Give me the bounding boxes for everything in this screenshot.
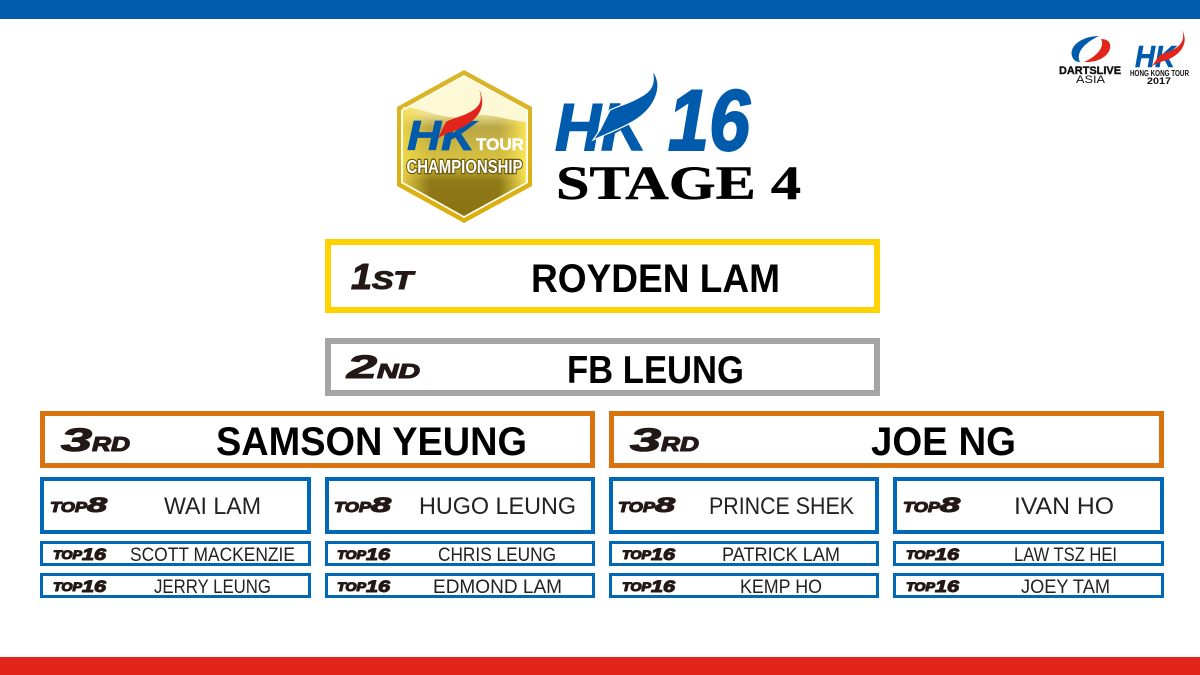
badge: HK Tour Championship hexagon [397,70,532,223]
label: top 8 [334,494,392,517]
name: Scott Mackenzie: SCOTT MACKENZIE [130,544,295,566]
label: top 16: TOP [337,548,367,562]
name: Jerry Leung: JERRY LEUNG [154,576,271,598]
label: top 16: 16 [82,545,107,564]
name: Joe Ng: JOE NG [871,420,1016,464]
panel: top 16 Joey Tam [894,574,1162,598]
label: top 16: 16 [366,545,391,564]
label: top 8: 8 [940,494,961,517]
label: top 16: TOP [622,580,652,594]
label: 2nd: 2 [345,349,377,385]
panel: 3rd place Samson Yeung [42,414,592,466]
badge: HK Tour Championship hexagon: TOUR [476,135,524,154]
label: top 8: TOP [903,499,941,516]
label: top 16: TOP [906,548,936,562]
panel: top 8 Prince Shek [611,479,877,532]
panel: top 16 Jerry Leung [42,574,310,598]
label: top 8: TOP [334,499,372,516]
logo: HK 16: 16 [668,73,751,169]
label: top 8 [618,494,676,517]
label: 1st: 1 [351,256,372,297]
top blue bar [0,0,1200,19]
logo: Hong Kong Tour 2017 [1130,30,1189,86]
panel: top 16 Law Tsz Hei [894,542,1162,566]
name: Edmond Lam: EDMOND LAM [433,576,562,598]
name: Samson Yeung: SAMSON YEUNG [216,420,527,464]
name: Royden Lam: ROYDEN LAM [531,257,780,301]
label: top 16: TOP [906,580,936,594]
label: top 16 [906,545,960,564]
badge: HK Tour Championship hexagon: HK [407,112,478,159]
panel: top 8 Ivan Ho [895,479,1162,532]
label: top 16: 16 [366,577,391,596]
name: Law Tsz Hei: LAW TSZ HEI [1014,544,1117,566]
label: top 16: TOP [53,580,83,594]
label: top 8: TOP [618,499,656,516]
label: top 16: 16 [651,545,676,564]
label: top 16: TOP [337,580,367,594]
label: top 16 [622,545,676,564]
panel: 2nd place [328,341,877,393]
name: FB Leung: FB LEUNG [567,349,744,392]
heading: STAGE 4: STAGE 4 [556,157,801,210]
name: Kemp Ho: KEMP HO [740,576,822,598]
label: top 16: 16 [935,545,960,564]
label: top 8 [903,494,961,517]
label: top 8: 8 [371,494,392,517]
label: top 8 [50,494,108,517]
label: 3rd: RD [661,434,699,456]
panel: top 16 Scott Mackenzie [42,542,310,566]
label: 3rd [630,422,699,458]
label: 1st: ST [372,267,416,295]
panel: top 8 Wai Lam [42,479,309,532]
panel: top 16 Chris Leung [326,542,594,566]
label: top 16 [337,545,391,564]
label: top 16 [337,577,391,596]
logo: DARTSLIVE ASIA [1059,36,1121,86]
label: top 16: TOP [622,548,652,562]
logo: HK 16 [555,70,751,169]
name: Chris Leung: CHRIS LEUNG [438,544,556,566]
label: 3rd [61,422,130,458]
logo: Hong Kong Tour 2017: HK [1135,39,1177,74]
name: Joey Tam: JOEY TAM [1021,576,1110,598]
name: Hugo Leung: HUGO LEUNG [419,493,576,520]
label: top 16 [906,577,960,596]
panel: 3rd place Joe Ng [612,414,1162,466]
label: top 16: 16 [935,577,960,596]
name: Wai Lam: WAI LAM [164,493,261,520]
label: top 16: 16 [651,577,676,596]
bottom red bar [0,657,1200,675]
logo: DARTSLIVE ASIA: DARTSLIVE [1059,65,1121,77]
label: top 16: 16 [82,577,107,596]
panel: 1st place [328,242,877,310]
label: 1st [351,256,416,297]
logo: HK 16: HK [555,90,651,165]
label: 2nd: ND [377,361,420,383]
name: Patrick Lam: PATRICK LAM [722,544,840,566]
label: 3rd: 3 [61,422,92,458]
label: top 16 [53,545,107,564]
label: 3rd: RD [92,434,130,456]
label: top 16: TOP [53,548,83,562]
label: top 8: 8 [655,494,676,517]
badge: HK Tour Championship hexagon: CHAMPIONSHIP [406,157,522,177]
logo: DARTSLIVE ASIA: ASIA [1076,74,1106,86]
label: top 8: 8 [87,494,108,517]
panel: top 16 Patrick Lam [610,542,878,566]
label: top 8: TOP [50,499,88,516]
label: 3rd: 3 [630,422,661,458]
name: Ivan Ho: IVAN HO [1014,493,1114,520]
panel: top 8 Hugo Leung [327,479,593,532]
label: 2nd [345,349,420,385]
panel: top 16 Kemp Ho [610,574,878,598]
label: top 16 [622,577,676,596]
icon: dartslive swoosh [1072,36,1110,62]
panel: top 16 Edmond Lam [326,574,594,598]
label: top 16 [53,577,107,596]
logo: Hong Kong Tour 2017: 2017 [1147,76,1171,86]
name: Prince Shek: PRINCE SHEK [709,493,854,520]
